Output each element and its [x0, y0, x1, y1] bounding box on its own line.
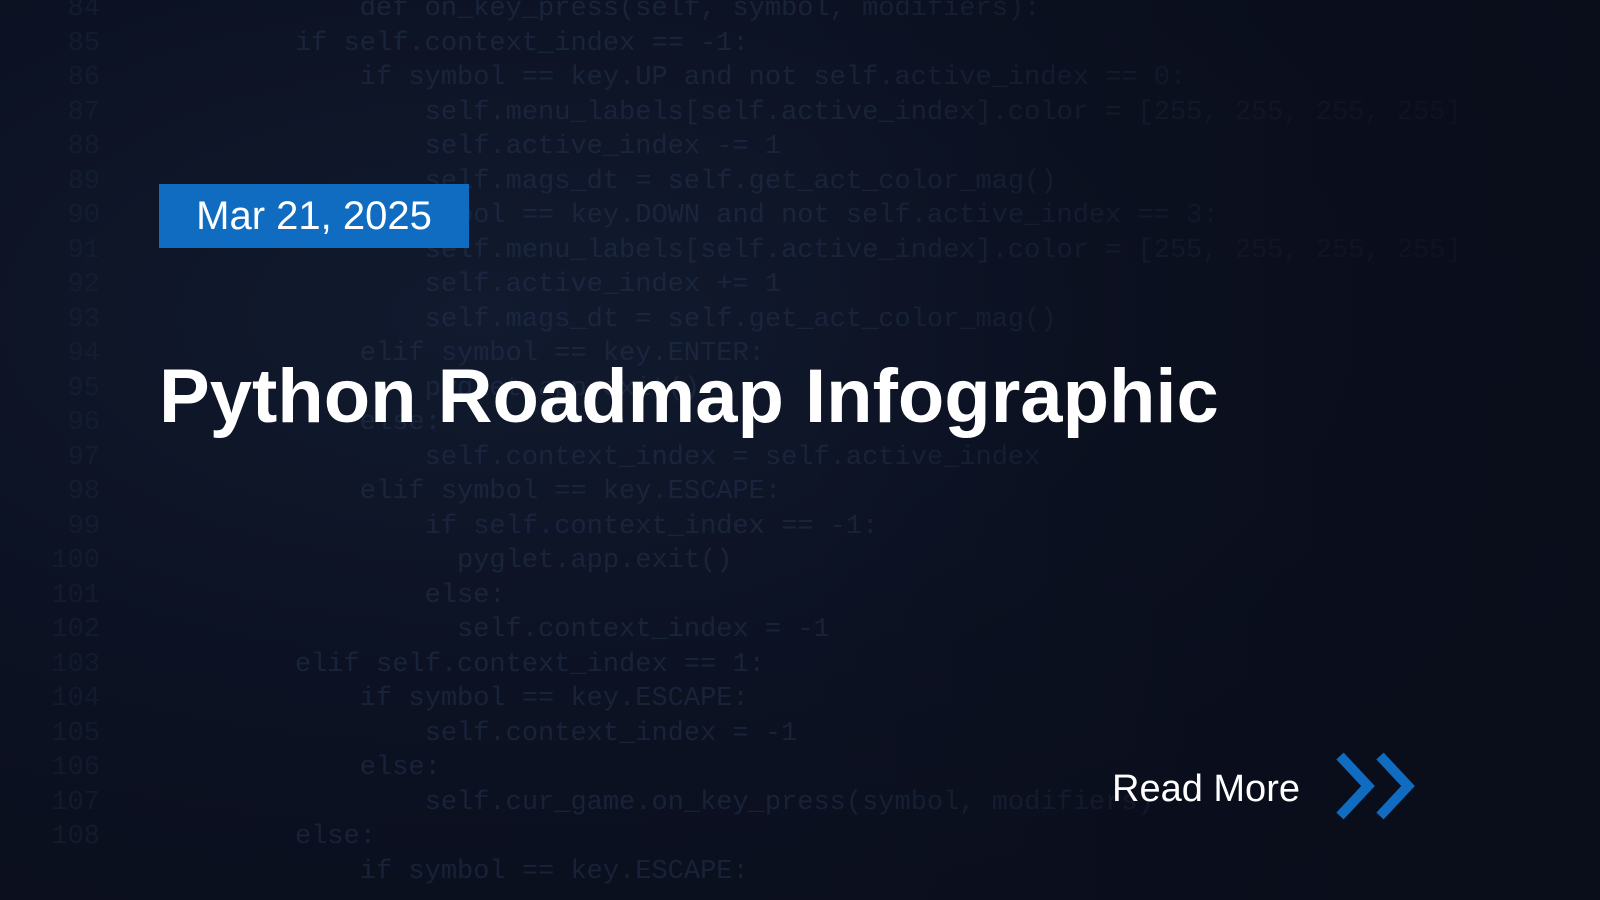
read more link: Read More — [1112, 768, 1300, 810]
date badge — [159, 184, 469, 248]
title: Python Roadmap Infographic — [159, 354, 1219, 439]
icon: double chevron — [1336, 752, 1415, 820]
background code texture: 84 85 86 87 88 89 90 91 92 93 94 95 96 97 98 99 100 101 102 103 104 105 106 107 108 — [51, 0, 100, 852]
date badge: Mar 21, 2025 — [196, 194, 432, 238]
background code texture: def on_key_press(self, symbol, modifiers): if self.context_index == -1: if symbol == key.UP and not self.active_index == 0: self.menu_labels[self.active_index].color = [255, 255, 255, 255] self.active_index -= 1 self.mags_dt = self.get_act_color_mag() if symbol == key.DOWN and not self.active_index == 3: self.menu_labels[self.active_index].color = [255, 255, 255, 255] self.active_index += 1 self.mags_dt = self.get_act_color_mag() elif symbol == key.ENTER: pyglet.app.exit() else: self.context_index = self.active_index elif symbol == key.ESCAPE: if self.context_index == -1: pyglet.app.exit() else: self.context_index = -1 elif self.context_index == 1: if symbol == key.ESCAPE: self.context_index = -1 else: self.cur_game.on_key_press(symbol, modifiers) else: if symbol == key.ESCAPE: — [295, 0, 1462, 886]
